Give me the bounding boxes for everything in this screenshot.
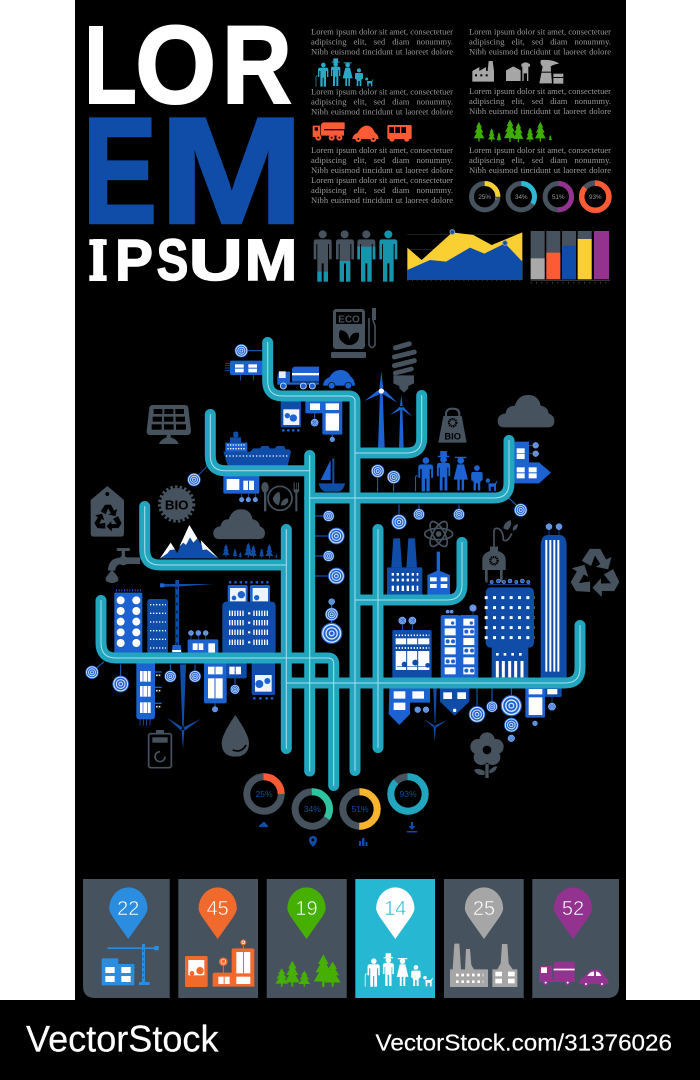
watermark url: VectorStock.com/31376026 [376, 1030, 672, 1056]
title line: IPSUM: P [115, 228, 153, 293]
icon: mountains [160, 525, 218, 558]
small building with dots [188, 630, 218, 654]
right upper blue icons [364, 372, 551, 530]
text block: right 3: Nibh euismod tincidunt ut laoreet dolore [469, 165, 611, 175]
icon: family [316, 58, 373, 87]
icon: oil drop [222, 715, 249, 757]
donut: 25% [247, 777, 281, 811]
big dotted tower [485, 579, 535, 678]
icon: solar panel [147, 405, 191, 444]
people fill chart [314, 230, 397, 282]
text block: right 1 [469, 26, 611, 56]
icon: download [407, 822, 417, 832]
title line: IPSUM: U [189, 228, 243, 293]
icon: factories [450, 944, 517, 987]
pin: 22: 22 [117, 898, 139, 920]
large office building [222, 582, 276, 654]
black poster panel [75, 0, 626, 1001]
icon: recycle tag [91, 486, 124, 537]
small donut: 34% [508, 183, 534, 210]
icon: plate and cutlery [261, 482, 299, 511]
icon: small bars [359, 838, 368, 846]
donut: 34% [295, 792, 330, 826]
icon: bio bag [438, 409, 467, 443]
text block: left 1 [311, 26, 453, 56]
pin: 25: 25 [473, 898, 495, 920]
small donut: 51%: 51% [552, 194, 565, 201]
text block: left 1: adipiscing elit, sed diam nonummy. [311, 36, 453, 46]
icon: bio bag: BIO [444, 431, 461, 441]
hanging arrow building [389, 687, 430, 725]
building with white panels [392, 617, 432, 679]
text block: left 1: Lorem ipsum dolor sit amet, consectetuer [311, 26, 453, 36]
header icons and charts [313, 58, 610, 283]
building with arrow [513, 442, 551, 483]
icon: battery [149, 730, 171, 768]
card: 52 vehicles [532, 879, 619, 998]
pipe network [101, 342, 580, 786]
twin apartment block [441, 604, 478, 678]
text block: right 2: Lorem ipsum dolor sit amet, consectetuer [469, 86, 611, 96]
donut: 93%: 93% [399, 789, 417, 799]
icon: small blue trees [222, 543, 278, 558]
stacked bar chart [531, 231, 610, 283]
hanging spirals [469, 688, 522, 742]
icon: light bulb [391, 341, 417, 393]
title line: IPSUM: M [245, 228, 297, 293]
icon: flower [470, 732, 504, 778]
spirals on centre column [315, 510, 345, 562]
hanging house [440, 687, 469, 716]
icon: grey cloud right [498, 395, 554, 427]
icon: eco fuel pump: ECO [338, 314, 360, 326]
text block: right 1: Lorem ipsum dolor sit amet, consectetuer [469, 26, 611, 36]
icon: orange vehicles [313, 122, 412, 142]
city diagram [85, 308, 623, 786]
icon: plug with leaf [482, 520, 518, 583]
title line: IPSUM: S [157, 228, 188, 293]
icon: atom [425, 519, 453, 549]
icon: small cloud [259, 822, 268, 827]
icon: eco fuel pump [331, 308, 376, 358]
title line: EM: E [83, 86, 157, 255]
upper blue icons [160, 344, 355, 562]
building under ship [223, 475, 259, 502]
donut: 25%: 25% [255, 789, 273, 799]
text block: left 4 [311, 175, 453, 205]
buildings under top pipe [281, 400, 342, 442]
small donut: 25%: 25% [478, 194, 491, 201]
text block: right 3: Lorem ipsum dolor sit amet, consectetuer [469, 145, 611, 155]
icon: white family [365, 953, 433, 987]
icon: bio badge [161, 488, 193, 520]
card: 19 trees [267, 879, 347, 998]
text block: left 4: adipiscing elit, sed diam nonummy. [311, 185, 453, 195]
title line: LOR: O [135, 4, 216, 127]
card: 14 people [355, 879, 435, 998]
white circle tower [114, 590, 142, 654]
pin: 45: 45 [207, 898, 229, 920]
small donut: 93%: 93% [589, 194, 602, 201]
icon: bio badge: BIO [165, 497, 189, 512]
donut: 51% [343, 792, 377, 826]
icon: blue family [415, 451, 497, 492]
crane [160, 580, 213, 654]
icon: small wind turbine [390, 395, 412, 447]
text block: left 3: Lorem ipsum dolor sit amet, consectetuer [311, 145, 453, 155]
text block: left 2: adipiscing elit, sed diam nonummy. [311, 96, 453, 106]
card: 25 factories [444, 879, 524, 998]
donut: 93% [391, 777, 425, 811]
text block: left 4: Nibh euismod tincidunt ut laoreet dolore [311, 195, 453, 205]
text block: right 3 [469, 145, 611, 175]
icon: ship [223, 432, 291, 467]
icon: sailboat [319, 458, 345, 492]
text block: right 1: Nibh euismod tincidunt ut laoreet dolore [469, 46, 611, 56]
text block: left 1: Nibh euismod tincidunt ut laoreet dolore [311, 46, 453, 56]
watermark logo text: VectorStock [26, 1019, 219, 1060]
icon: hanging wind turbine left [167, 664, 201, 749]
text block: left 2: Lorem ipsum dolor sit amet, consectetuer [311, 86, 453, 96]
card: 45 buildings [178, 879, 258, 998]
buildings below middle pipe [85, 662, 275, 726]
pin: 14: 14 [384, 898, 406, 920]
icon: faucet [108, 548, 140, 580]
donut: 51%: 51% [351, 804, 369, 814]
pin: 52: 52 [562, 898, 584, 920]
text block: left 3: Nibh euismod tincidunt ut laoreet dolore [311, 165, 453, 175]
pin: 19: 19 [295, 898, 318, 920]
icon: green forest [275, 954, 341, 987]
title line: IPSUM: I [90, 228, 106, 293]
small donut: 25% [472, 184, 498, 210]
icon: green trees [474, 119, 552, 142]
text block: left 3: adipiscing elit, sed diam nonummy. [311, 155, 453, 165]
title line: LOR: R [222, 4, 292, 127]
factory [387, 538, 422, 596]
icon: faucet drop [106, 570, 118, 583]
card: 22 construction [83, 879, 170, 998]
icon: location pin [309, 836, 317, 847]
text block: left 4: Lorem ipsum dolor sit amet, consectetuer [311, 175, 453, 185]
small donut: 51% [545, 183, 572, 210]
watermark bar [0, 1000, 700, 1080]
text block: left 2: Nibh euismod tincidunt ut laoreet dolore [311, 106, 453, 116]
spiral and block top [225, 344, 263, 381]
area chart [407, 230, 522, 281]
donut: 34%: 34% [304, 804, 321, 814]
icon: recycle arrows [565, 549, 623, 601]
title line: LOR: L [84, 4, 137, 127]
mid right buildings [387, 523, 567, 742]
small donut: 34%: 34% [515, 194, 528, 201]
text block: left 3 [311, 145, 453, 175]
spirals around family [371, 464, 527, 530]
icon: orange buildings [185, 939, 254, 987]
icon: purple truck and car [539, 962, 609, 987]
title line: EM: M [159, 86, 304, 255]
icon: blue car [323, 370, 355, 389]
spiral stack on centre [315, 568, 345, 644]
dotted tower [147, 599, 168, 654]
small donut: 93% [582, 183, 609, 210]
spiral left of ship pipe [187, 466, 207, 486]
icon: grey factories [472, 60, 563, 84]
icon: hanging wind turbine right [424, 688, 447, 742]
text block: left 2 [311, 86, 453, 116]
small blue house with chimney [427, 552, 450, 596]
text block: right 1: adipiscing elit, sed diam nonummy. [469, 36, 611, 46]
icon: blue truck [277, 367, 319, 389]
text block: right 2 [469, 86, 611, 116]
hanging blocks right [525, 687, 562, 726]
icon: big wind turbine [364, 372, 397, 447]
mid left buildings [85, 568, 345, 749]
text block: right 2: Nibh euismod tincidunt ut laoreet dolore [469, 106, 611, 116]
title [83, 4, 304, 293]
icon: grey cloud left [213, 509, 265, 539]
text block: right 2: adipiscing elit, sed diam nonummy. [469, 96, 611, 106]
icon: building and crane [102, 944, 159, 985]
text block: right 3: adipiscing elit, sed diam nonummy. [469, 155, 611, 165]
striped skyscraper [541, 523, 567, 679]
title I serifs [89, 239, 107, 281]
